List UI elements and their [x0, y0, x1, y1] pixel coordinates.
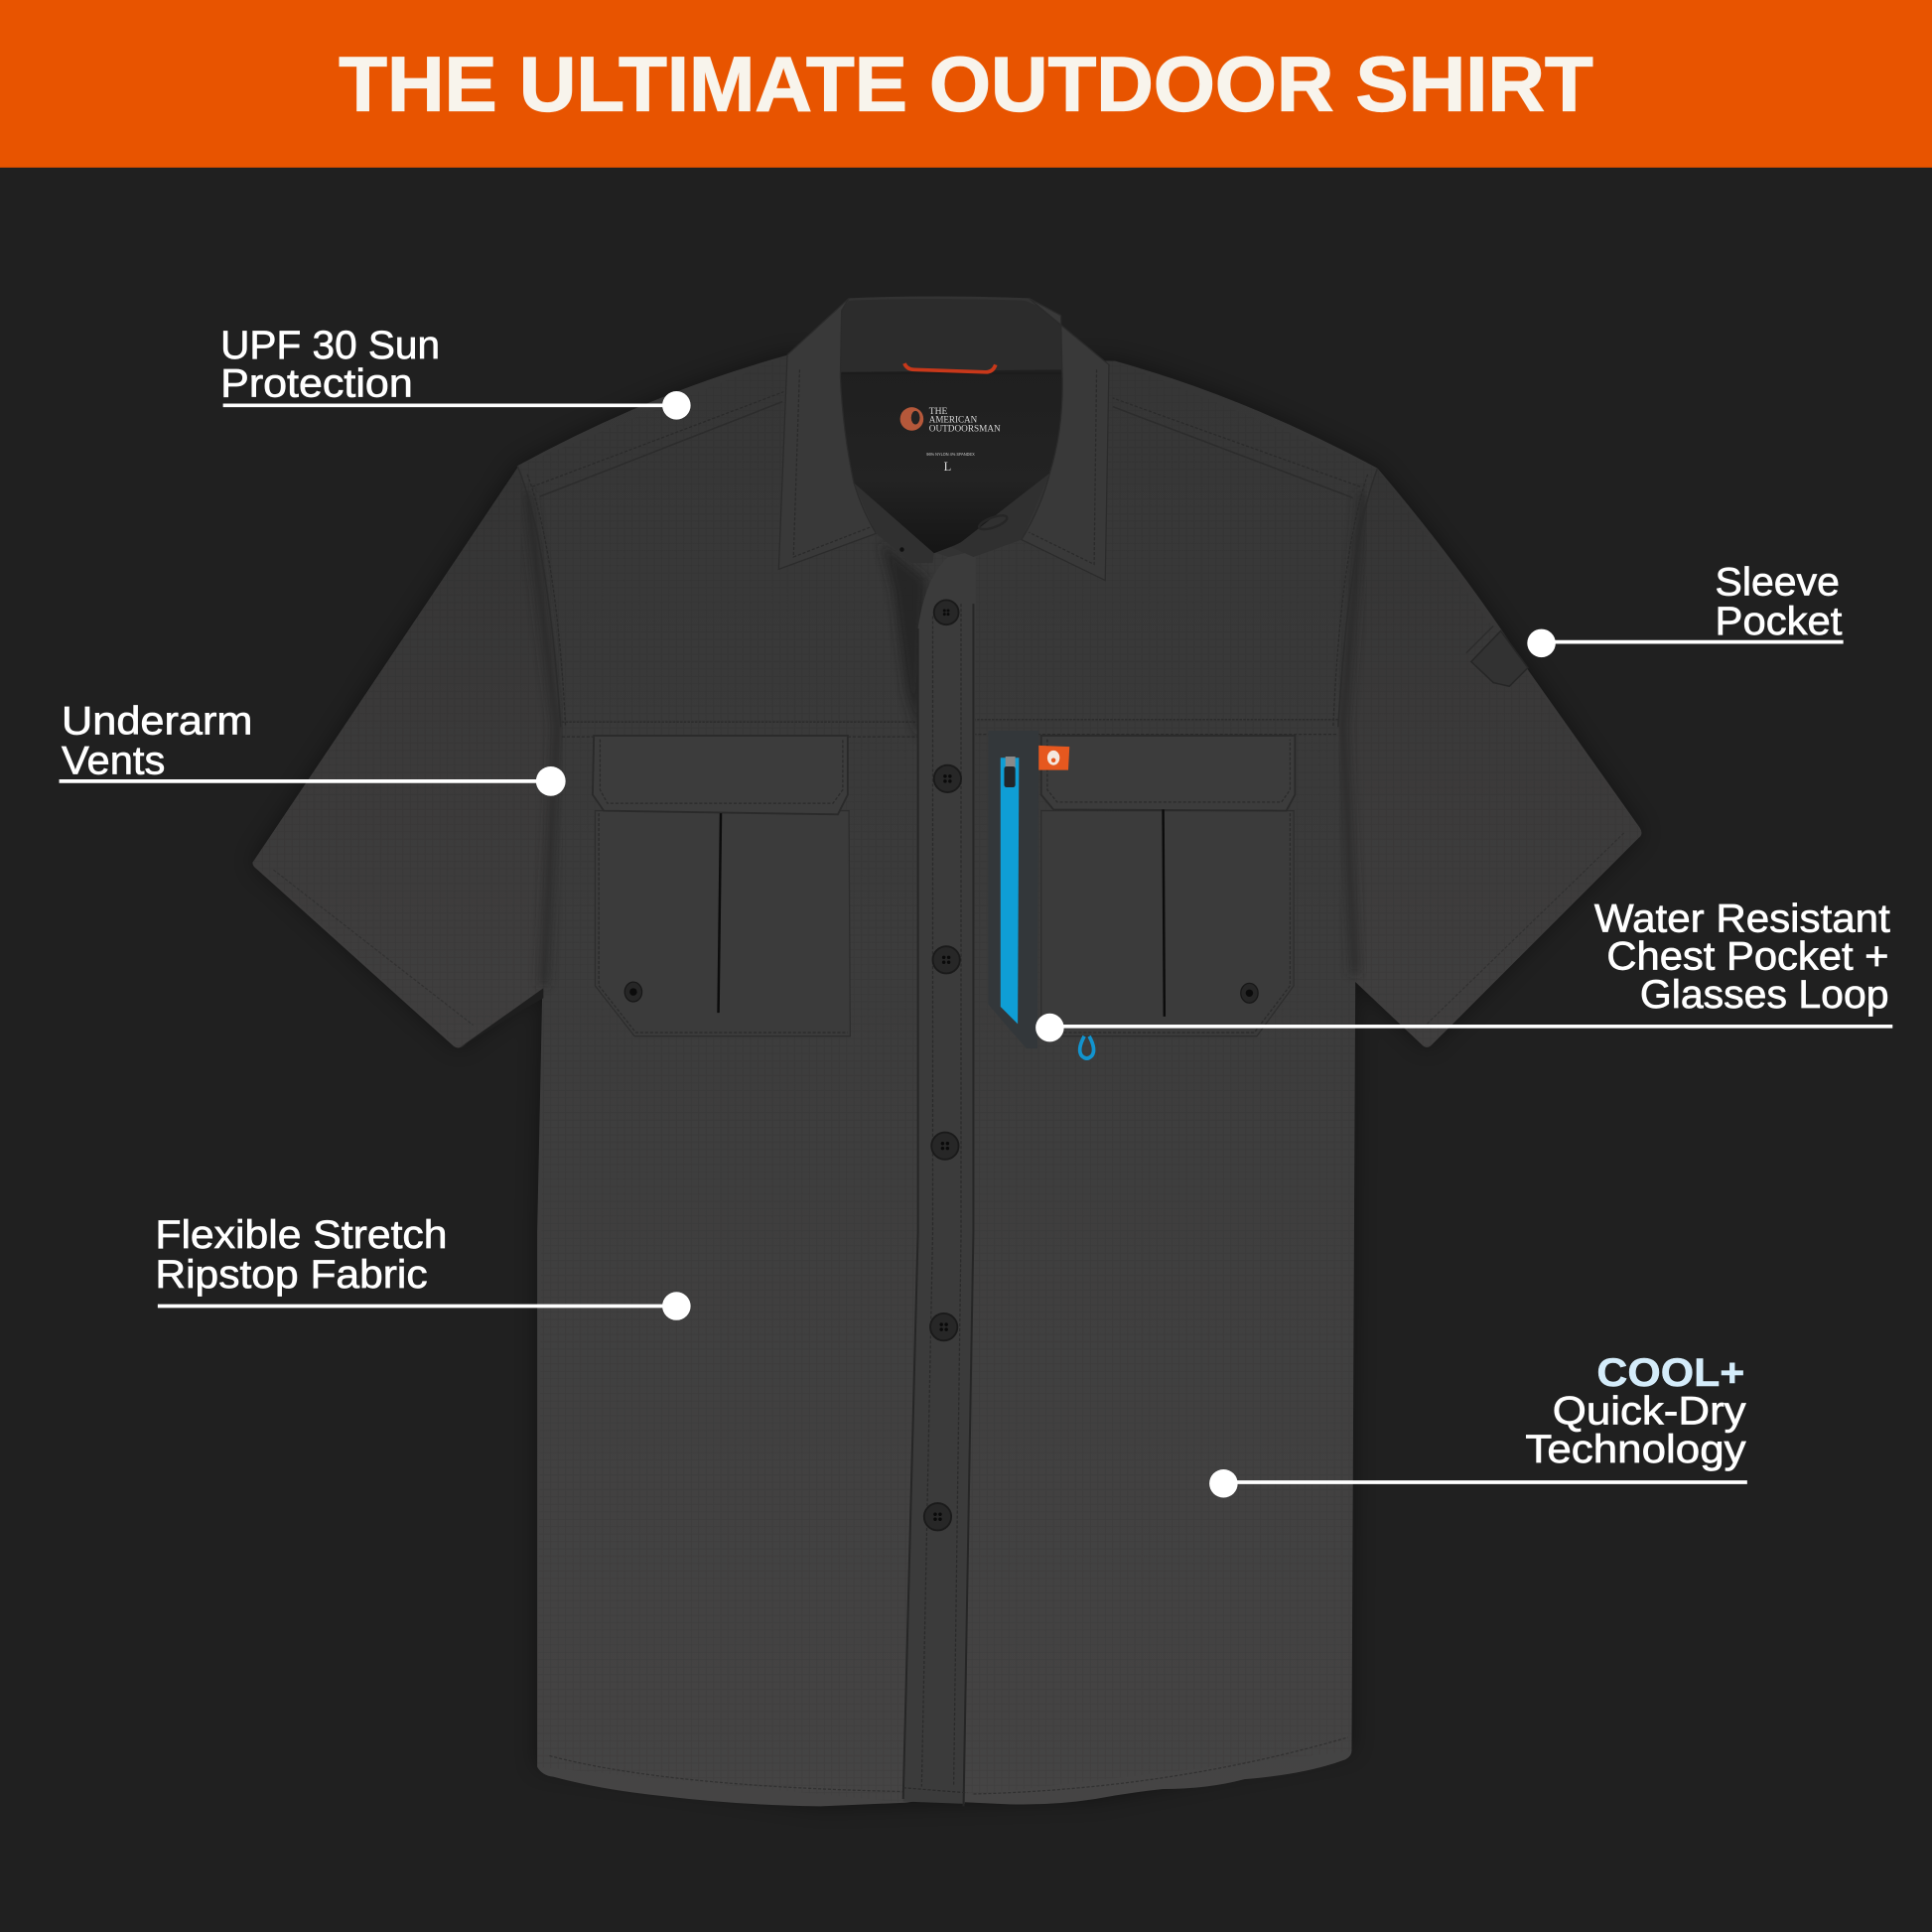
sleeve hems	[274, 833, 1624, 1028]
shirt illustration	[252, 296, 1642, 1806]
callout: COOL+ Quick-Dry Technology: COOL+	[1596, 1351, 1744, 1395]
brand logo	[900, 407, 923, 431]
callout: Underarm Vents	[60, 700, 566, 796]
callout: Water Resistant Chest Pocket + Glasses Loop: Water Resistant	[1594, 897, 1890, 940]
sleeve pocket	[1466, 625, 1528, 686]
hanger loop	[904, 363, 996, 372]
collar	[778, 296, 1109, 581]
orange tag	[1038, 746, 1069, 770]
placket	[903, 552, 976, 1804]
right chest pocket	[1041, 736, 1295, 1036]
pocket pleat	[719, 813, 721, 1013]
collar right wing	[1022, 298, 1109, 581]
left sleeve	[252, 466, 579, 1048]
callout: COOL+ Quick-Dry Technology: Technology	[1525, 1428, 1746, 1471]
collar left wing	[778, 298, 876, 569]
glasses loop	[1080, 1036, 1094, 1058]
callout: Sleeve Pocket: Sleeve	[1716, 560, 1840, 604]
shadow beside placket	[881, 542, 926, 740]
header banner	[0, 0, 1932, 168]
collar inner neck	[840, 369, 1062, 553]
callout: COOL+ Quick-Dry Technology	[1209, 1351, 1747, 1498]
title: THE ULTIMATE OUTDOOR SHIRT	[339, 41, 1593, 128]
shirt body	[517, 354, 1378, 1806]
callout: UPF 30 Sun Protection: UPF 30 Sun	[220, 324, 440, 367]
callout: Flexible Stretch Ripstop Fabric: Flexible Stretch	[155, 1213, 448, 1257]
pocket grommet	[1241, 983, 1258, 1003]
chest seams	[562, 720, 1338, 722]
callout: COOL+ Quick-Dry Technology: Quick-Dry	[1553, 1390, 1746, 1434]
size: L	[944, 460, 951, 474]
callout: Water Resistant Chest Pocket + Glasses Loop: Glasses Loop	[1640, 973, 1889, 1017]
callout: UPF 30 Sun Protection: Protection	[220, 362, 413, 406]
brand text: AMERICAN	[929, 416, 977, 426]
callout: Water Resistant Chest Pocket + Glasses Loop: Chest Pocket +	[1606, 935, 1889, 979]
button stand	[854, 483, 934, 563]
fabric note: 96% NYLON 4% SPANDEX	[926, 452, 975, 457]
callout: UPF 30 Sun Protection	[220, 324, 691, 420]
zipper pull	[1004, 757, 1016, 787]
collar back band	[840, 299, 1062, 372]
callout: Flexible Stretch Ripstop Fabric: Ripstop Fabric	[155, 1253, 428, 1297]
hem stitching	[550, 1737, 1348, 1794]
buttons	[924, 600, 961, 1530]
callout: Underarm Vents: Vents	[62, 739, 165, 782]
brand text: THE	[929, 407, 948, 417]
brand text: OUTDOORSMAN	[929, 424, 1001, 434]
neck label	[900, 407, 1001, 474]
callout: Sleeve Pocket: Pocket	[1716, 600, 1842, 643]
callout: Sleeve Pocket	[1527, 560, 1844, 657]
pocket pleat	[1164, 809, 1165, 1017]
water resistant zipper pocket	[988, 731, 1038, 1048]
callout: Underarm Vents: Underarm	[62, 700, 252, 744]
brand text	[929, 407, 1001, 434]
pocket grommet	[624, 982, 642, 1002]
left chest pocket	[593, 736, 850, 1036]
callout: Flexible Stretch Ripstop Fabric	[155, 1213, 691, 1320]
right sleeve	[1318, 469, 1641, 1047]
callout: Water Resistant Chest Pocket + Glasses Loop	[1035, 897, 1892, 1041]
yoke seams	[540, 402, 1353, 497]
